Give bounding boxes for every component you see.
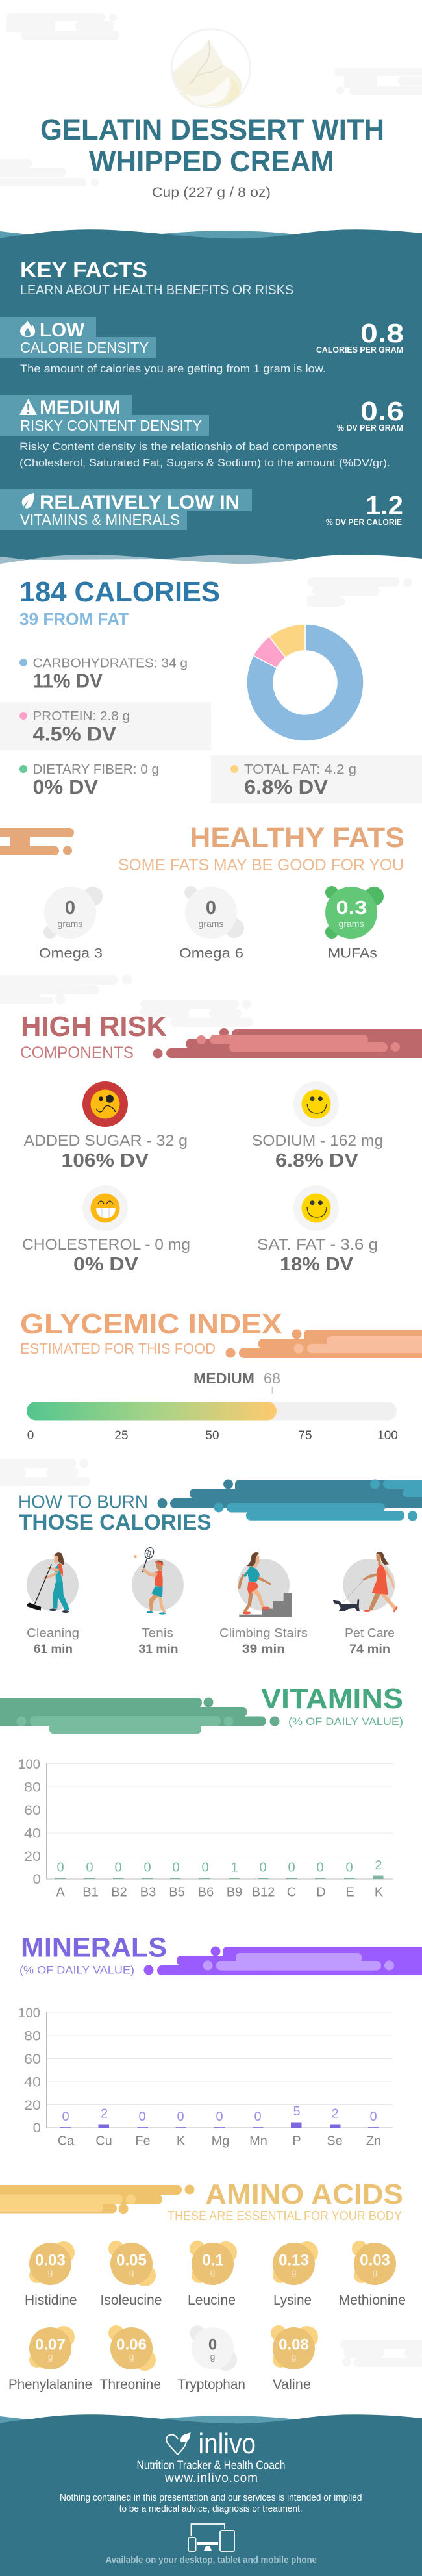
amino: valine: g: [292, 2351, 296, 2362]
bar chart: vitamins: 0: [345, 1860, 353, 1875]
bar chart: minerals: 2: [101, 2107, 108, 2121]
heading: glycemic index: GLYCEMIC INDEX: [20, 1308, 282, 1340]
stat: omega 3: 0: [65, 898, 75, 918]
panel: how to burn those calories: [0, 1459, 422, 1656]
subheading: ESTIMATED FOR THIS FOOD: [20, 1340, 216, 1357]
stat: MUFAs: 0.3: [336, 898, 367, 918]
bar chart: vitamins: 20: [24, 1849, 41, 1864]
subheading: from fat: 39 FROM FAT: [19, 609, 129, 629]
panel: key facts: [0, 229, 422, 564]
disclaimer: [60, 2492, 362, 2514]
amino: phenylalanine: 0.07: [35, 2336, 66, 2354]
bar chart: vitamins: B5: [169, 1885, 185, 1899]
amino: histidine: g: [48, 2267, 53, 2277]
bar chart: minerals: 0: [177, 2110, 184, 2124]
bar chart: vitamins: 0: [288, 1860, 295, 1875]
bar chart: vitamins: 1: [230, 1860, 238, 1875]
food image: whipped cream: [171, 29, 251, 108]
bar chart: minerals: 0: [254, 2110, 262, 2124]
activity: pet care: 74 min: [349, 1643, 390, 1656]
fact: calorie density: LOW: [40, 320, 85, 341]
bar chart: minerals: [18, 2006, 393, 2149]
logo: inlivo: [166, 2428, 256, 2460]
gauge value: 68: [264, 1370, 280, 1387]
bar chart: minerals: Mg: [212, 2134, 229, 2149]
availability note: Available on your desktop, tablet and mobile phone: [105, 2555, 317, 2566]
amino: threonine: 0.06: [116, 2336, 147, 2354]
heading: how to burn: HOW TO BURN: [18, 1491, 148, 1512]
amino: lysine: 0.13: [279, 2251, 309, 2269]
amino: valine: 0.08: [279, 2336, 309, 2354]
panel: glycemic index: [20, 1308, 422, 1443]
subheading: THESE ARE ESSENTIAL FOR YOUR BODY: [168, 2209, 402, 2223]
fact: vitamins and minerals: RELATIVELY LOW IN: [40, 492, 240, 513]
icon: smiling face: [293, 1185, 339, 1231]
amino: valine: [271, 2325, 318, 2392]
fact: risky content density: 0.6: [360, 396, 404, 426]
bar chart: vitamins: E: [345, 1885, 354, 1899]
bar chart: vitamins: 0: [259, 1860, 267, 1875]
title: GELATIN DESSERT WITH: [40, 113, 384, 146]
gauge bar: [27, 1402, 397, 1420]
item: cholesterol: 0% DV: [73, 1254, 139, 1275]
gauge value: MEDIUM: [193, 1370, 254, 1387]
fact: risky content density: [0, 395, 404, 469]
bar chart: vitamins: B12: [252, 1885, 275, 1899]
bar chart: vitamins: B3: [140, 1885, 156, 1899]
bar chart: vitamins: B1: [82, 1885, 99, 1899]
bar chart: vitamins: 0: [201, 1860, 209, 1875]
panel: amino acids: [0, 2178, 422, 2392]
stat: omega 6: Omega 6: [179, 946, 243, 961]
bar chart: vitamins: B6: [198, 1885, 214, 1899]
bar chart: minerals: 5: [293, 2104, 301, 2119]
subheading: components: COMPONENTS: [20, 1044, 134, 1062]
amino: phenylalanine: [8, 2326, 92, 2392]
item: saturated fat: SAT. FAT - 3.6 g: [257, 1236, 378, 1254]
bar chart: minerals: Mn: [249, 2134, 267, 2149]
subheading: LEARN ABOUT HEALTH BENEFITS OR RISKS: [20, 283, 293, 297]
bar chart: vitamins: 0: [114, 1860, 122, 1875]
banner: vitamins: [0, 1698, 279, 1734]
fact: risky content density: RISKY CONTENT DENSITY: [20, 417, 202, 434]
item: saturated fat: 18% DV: [280, 1254, 354, 1275]
icon: person climbing stairs: [238, 1552, 292, 1617]
bar chart: vitamins: 0: [56, 1860, 64, 1875]
activity: pet care: Pet Care: [345, 1626, 395, 1641]
amino: isoleucine: Isoleucine: [100, 2293, 162, 2308]
bar chart: vitamins: B2: [111, 1885, 127, 1899]
fact: vitamins and minerals: 1.2: [366, 490, 403, 520]
bar chart: vitamins: 0: [86, 1860, 93, 1875]
amino: threonine: Threonine: [100, 2377, 161, 2392]
bar chart: vitamins: K: [375, 1885, 384, 1899]
bar chart: minerals: 100: [18, 2006, 40, 2021]
bar chart: minerals: Fe: [135, 2134, 151, 2149]
logo: inlivo: inlivo: [199, 2428, 256, 2460]
banner: healthy fats: [0, 828, 74, 855]
activity: tennis: 31 min: [139, 1643, 178, 1656]
stat: omega 3: [39, 887, 103, 961]
gauge scale: 50: [205, 1429, 219, 1443]
activity: tennis: [132, 1547, 184, 1656]
bar chart: vitamins: 0: [316, 1860, 324, 1875]
bar chart: minerals: 0: [138, 2110, 146, 2124]
activity: climbing stairs: 39 min: [242, 1643, 285, 1656]
activity: pet care: [333, 1552, 398, 1656]
amino: phenylalanine: Phenylalanine: [8, 2377, 92, 2392]
bar chart: vitamins: D: [316, 1885, 326, 1899]
activity: cleaning: 61 min: [34, 1643, 73, 1656]
disclaimer: to be a medical advice, diagnosis or treatment.: [119, 2503, 303, 2514]
amino: methionine: Methionine: [339, 2293, 406, 2308]
fact: risky content density: (Cholesterol, Saturated Fat, Sugars & Sodium) to the amount (%DV/gr).: [19, 457, 390, 469]
amino: methionine: g: [373, 2267, 377, 2277]
banner: glycemic index: [226, 1329, 422, 1358]
amino: tryptophan: g: [210, 2351, 215, 2362]
amino: leucine: 0.1: [202, 2251, 224, 2269]
icon: worried face: [82, 1081, 128, 1127]
bar chart: vitamins: 0: [32, 1872, 41, 1887]
item: sodium: SODIUM - 162 mg: [252, 1132, 383, 1150]
amino: isoleucine: g: [129, 2267, 134, 2277]
icon: smiling face: [293, 1081, 339, 1127]
heading: high risk: HIGH RISK: [21, 1011, 167, 1042]
legend: total fat: [230, 763, 356, 798]
activity: climbing stairs: Climbing Stairs: [219, 1626, 308, 1641]
legend: carbohydrates: [19, 656, 188, 692]
subheading: (% OF DAILY VALUE): [288, 1715, 403, 1728]
icon: leaf: [22, 493, 34, 509]
bar chart: minerals: Cu: [95, 2134, 112, 2149]
bar chart: vitamins: 80: [24, 1780, 41, 1795]
bar chart: vitamins: 0: [172, 1860, 180, 1875]
stat: omega 3: grams: [58, 918, 82, 929]
bar chart: minerals: P: [292, 2134, 301, 2149]
item: added sugar: [23, 1081, 188, 1171]
fact: calorie density: CALORIES PER GRAM: [316, 345, 403, 355]
fact: vitamins and minerals: [0, 489, 403, 530]
bar chart: minerals: 40: [24, 2075, 41, 2090]
fact: risky content density: % DV PER GRAM: [337, 423, 403, 433]
bar chart: minerals: 60: [24, 2052, 41, 2067]
fact: vitamins and minerals: % DV PER CALORIE: [326, 517, 402, 527]
amino: lysine: Lysine: [273, 2293, 312, 2308]
bar chart: minerals: Se: [327, 2134, 343, 2149]
title: WHIPPED CREAM: [89, 145, 334, 178]
bar chart: minerals: 80: [24, 2029, 41, 2043]
bar chart: minerals: 0: [62, 2110, 69, 2124]
panel: healthy fats: [0, 822, 404, 961]
item: cholesterol: CHOLESTEROL - 0 mg: [22, 1236, 190, 1254]
heading: minerals: MINERALS: [21, 1932, 167, 1963]
banner: minerals: [144, 1946, 422, 1975]
amino: histidine: [25, 2241, 77, 2308]
fact: risky content density: MEDIUM: [40, 397, 121, 418]
legend: protein: [19, 709, 130, 746]
amino: methionine: 0.03: [360, 2251, 390, 2269]
bar chart: vitamins: 2: [375, 1858, 382, 1873]
bar chart: vitamins: 100: [18, 1757, 40, 1772]
amino: methionine: [339, 2241, 406, 2308]
fact: calorie density: CALORIE DENSITY: [20, 339, 149, 356]
activity: climbing stairs: [219, 1552, 308, 1656]
stat: MUFAs: [325, 886, 384, 961]
activity: cleaning: Cleaning: [27, 1626, 79, 1641]
legend: protein: PROTEIN: 2.8 g: [32, 709, 130, 724]
legend: carbohydrates: 11% DV: [32, 669, 103, 692]
header: [0, 13, 422, 200]
legend: dietary fiber: 0% DV: [32, 776, 98, 798]
stat: omega 6: [179, 886, 244, 961]
gauge scale: 25: [114, 1429, 129, 1443]
bar chart: vitamins: 40: [24, 1826, 41, 1841]
amino: tryptophan: 0: [208, 2336, 217, 2354]
amino: tryptophan: Tryptophan: [178, 2377, 245, 2392]
subheading: SOME FATS MAY BE GOOD FOR YOU: [118, 856, 404, 874]
item: added sugar: 106% DV: [61, 1150, 149, 1171]
icon: person sweeping: [27, 1552, 79, 1613]
panel: minerals: [18, 1932, 422, 2149]
panel: calories: [0, 576, 422, 803]
fact: calorie density: The amount of calories you are getting from 1 gram is low.: [20, 362, 326, 375]
heading: those calories: THOSE CALORIES: [19, 1510, 212, 1535]
icon: devices: [188, 2524, 234, 2551]
heading: calories: 184 CALORIES: [19, 576, 220, 608]
gauge scale: 100: [377, 1429, 398, 1443]
item: saturated fat: [257, 1185, 378, 1275]
gauge scale: 75: [298, 1429, 312, 1443]
banner: high risk: [153, 1028, 422, 1059]
bar chart: minerals: 2: [331, 2107, 339, 2121]
bar chart: vitamins: A: [56, 1885, 65, 1899]
stat: MUFAs: MUFAs: [328, 946, 377, 961]
gauge scale: 0: [27, 1429, 34, 1443]
bar chart: minerals: 0: [216, 2110, 223, 2124]
icon: tennis player: [132, 1547, 184, 1615]
icon: grinning face: [82, 1185, 128, 1231]
bar chart: vitamins: 60: [24, 1803, 41, 1818]
legend: protein: 4.5% DV: [32, 722, 116, 746]
bar chart: vitamins: 0: [143, 1860, 151, 1875]
amino: leucine: [188, 2241, 237, 2308]
panel: vitamins: [0, 1683, 403, 1899]
amino: phenylalanine: g: [48, 2351, 53, 2362]
legend row highlights: [0, 702, 422, 803]
fact: vitamins and minerals: VITAMINS & MINERALS: [20, 511, 180, 528]
disclaimer: Nothing contained in this presentation and our services is intended or implied: [60, 2492, 362, 2503]
legend: dietary fiber: DIETARY FIBER: 0 g: [32, 763, 159, 777]
heading: key facts: KEY FACTS: [20, 258, 147, 282]
amino: valine: Valine: [273, 2377, 311, 2392]
stat: MUFAs: grams: [339, 918, 364, 929]
amino: threonine: g: [129, 2351, 134, 2362]
fact: calorie density: 0.8: [360, 318, 404, 348]
amino: isoleucine: [100, 2241, 162, 2308]
gauge scale: [27, 1429, 398, 1443]
amino: leucine: Leucine: [188, 2293, 236, 2308]
amino: threonine: [100, 2325, 161, 2392]
stat: omega 6: 0: [206, 898, 216, 918]
stat: omega 3: Omega 3: [39, 946, 103, 961]
item: added sugar: ADDED SUGAR - 32 g: [23, 1132, 188, 1150]
subheading: (% OF DAILY VALUE): [19, 1964, 134, 1976]
title: [40, 113, 384, 178]
heading: vitamins: VITAMINS: [261, 1683, 403, 1715]
amino: isoleucine: 0.05: [116, 2251, 147, 2269]
activity: cleaning: [27, 1552, 79, 1656]
amino: histidine: Histidine: [25, 2293, 77, 2308]
serving size: Cup (227 g / 8 oz): [152, 185, 271, 200]
legend: total fat: TOTAL FAT: 4.2 g: [244, 763, 356, 777]
panel: footer: [0, 2414, 422, 2576]
bar chart: vitamins: C: [287, 1885, 296, 1899]
panel: high risk: [0, 974, 422, 1275]
legend: total fat: 6.8% DV: [244, 776, 328, 798]
item: sodium: 6.8% DV: [275, 1150, 359, 1171]
amino: lysine: g: [292, 2267, 296, 2277]
legend: carbohydrates: CARBOHYDRATES: 34 g: [32, 656, 188, 670]
amino: lysine: [273, 2241, 318, 2308]
website: www.inlivo.com: [164, 2471, 258, 2485]
bar chart: minerals: Zn: [366, 2134, 381, 2149]
bar chart: vitamins: B9: [227, 1885, 242, 1899]
item: sodium: [252, 1081, 383, 1171]
fact: risky content density: Risky Content density is the relationship of bad components: [19, 440, 338, 453]
donut chart: [247, 624, 364, 741]
bar chart: minerals: 0: [369, 2110, 377, 2124]
fact: calorie density: [0, 317, 404, 375]
legend: dietary fiber: [19, 763, 159, 798]
bar chart: minerals: K: [177, 2134, 186, 2149]
banner: burn: [157, 1480, 422, 1521]
banner: amino acids: [0, 2185, 195, 2214]
item: cholesterol: [22, 1185, 190, 1275]
bar chart: vitamins: [18, 1757, 393, 1899]
icon: flame: [20, 320, 35, 337]
activity: tennis: Tenis: [142, 1626, 173, 1641]
tagline: Nutrition Tracker & Health Coach: [136, 2459, 286, 2472]
amino: leucine: g: [210, 2267, 215, 2277]
stat: omega 6: grams: [199, 918, 223, 929]
amino: tryptophan: [178, 2325, 245, 2392]
heading: amino acids: AMINO ACIDS: [205, 2178, 403, 2210]
bar chart: minerals: 0: [32, 2121, 41, 2136]
heading: healthy fats: HEALTHY FATS: [190, 822, 404, 853]
gauge value: [193, 1370, 280, 1394]
icon: person walking dog: [333, 1552, 398, 1612]
bar chart: minerals: Ca: [58, 2134, 75, 2149]
icon: warning triangle: [19, 399, 37, 415]
amino: histidine: 0.03: [35, 2251, 66, 2269]
bar chart: minerals: 20: [24, 2098, 41, 2113]
